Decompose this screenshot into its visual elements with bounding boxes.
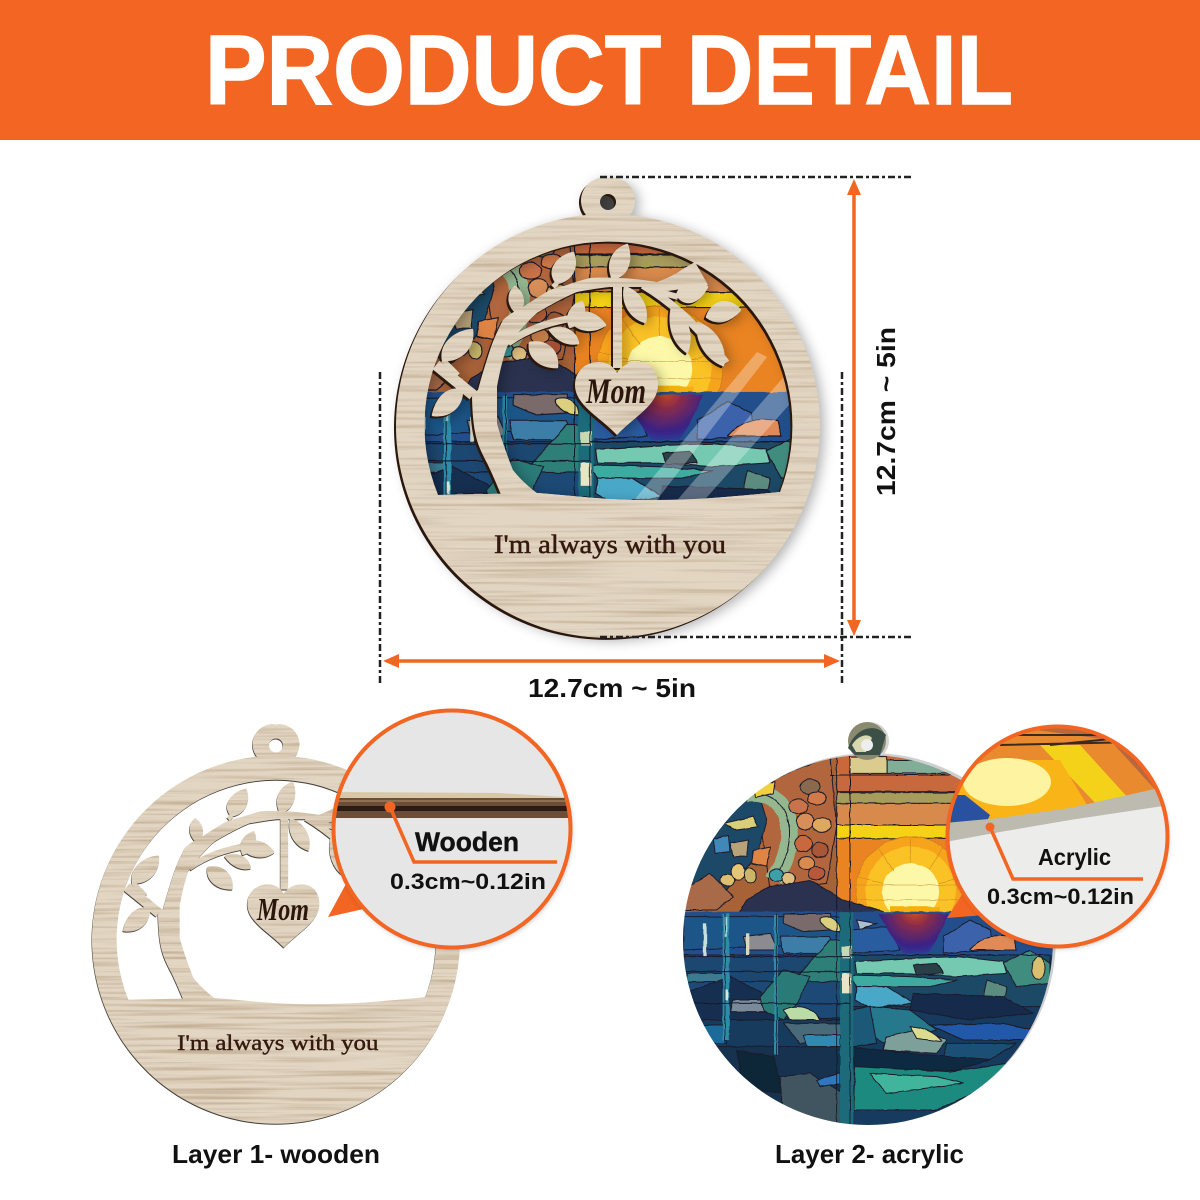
layer 2: acrylic ornament [683, 722, 1056, 1125]
pointer: acrylic callout [947, 893, 985, 918]
title banner [0, 0, 1200, 140]
label: layer 2: Layer 2- acrylic [775, 1139, 964, 1169]
hanger tab [848, 722, 886, 760]
callout: acrylic thickness magnifier: Acrylic [1038, 844, 1111, 870]
title banner: PRODUCT DETAIL [205, 15, 1013, 125]
engraved message: I'm always with you [177, 1030, 378, 1055]
engraved message: I'm always with you [494, 530, 726, 559]
main ornament: wood over stained glass [393, 174, 831, 648]
callout: acrylic thickness magnifier [940, 720, 1180, 946]
width dimension: dashed guides, arrow and label [380, 372, 842, 703]
label: layer 1: Layer 1- wooden [172, 1139, 380, 1169]
callout: wooden thickness magnifier: Wooden [415, 827, 519, 857]
heart name: Mom: Mom [256, 893, 309, 928]
callout: wooden thickness magnifier [330, 710, 580, 948]
layer 1: wooden ornament [92, 724, 460, 1124]
height dimension: dashed guides, arrow and label [600, 177, 912, 637]
callout: wooden thickness magnifier: 0.3cm~0.12in [390, 869, 546, 894]
height dimension: dashed guides, arrow and label: 12.7cm ~ 5in [871, 327, 901, 496]
pointer: wooden callout [328, 882, 368, 917]
callout: acrylic thickness magnifier: 0.3cm~0.12in [987, 884, 1134, 909]
heart name: Mom: Mom [585, 371, 646, 411]
width dimension: dashed guides, arrow and label: 12.7cm ~ 5in [528, 673, 696, 703]
